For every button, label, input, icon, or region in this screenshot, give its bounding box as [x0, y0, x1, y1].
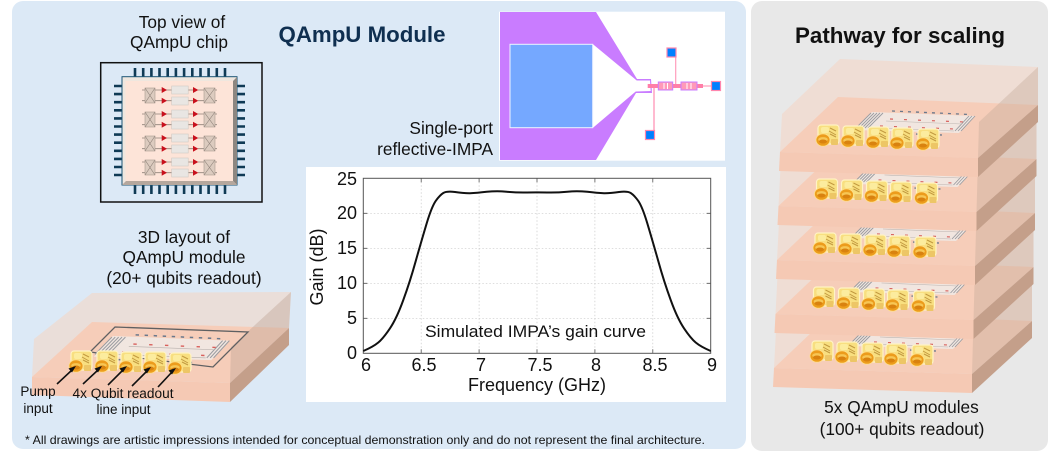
- x axis tick labels: [361, 355, 717, 375]
- label: qubit readout line input: 4x Qubit readout: [72, 386, 174, 401]
- heading: top view of chip: Top view of: [139, 12, 225, 32]
- y axis tick labels: 10: [337, 273, 357, 293]
- x axis tick labels: 7.5: [527, 355, 553, 375]
- heading: pathway for scaling: Pathway for scaling: [795, 23, 1005, 48]
- heading: top view of chip: QAmpU chip: [130, 32, 228, 52]
- y axis tick labels: 25: [337, 169, 357, 189]
- title: QAmpU Module: QAmpU Module: [278, 22, 446, 47]
- chart annotation: Simulated IMPA’s gain curve: [425, 323, 646, 341]
- diagram: stack of five modules: [773, 59, 1038, 393]
- panel: pathway for scaling background: [751, 1, 1048, 451]
- panel: QAmpU module background: [12, 1, 746, 449]
- label: pump input: input: [23, 401, 53, 416]
- label: pump input: Pump: [20, 384, 56, 399]
- x axis tick labels: 7: [476, 355, 486, 375]
- y axis tick labels: 5: [347, 308, 357, 328]
- label: single-port reflective IMPA: Single-port: [409, 118, 493, 138]
- diagram: 3D QAmpU module: [32, 292, 291, 402]
- label: single-port reflective IMPA: reflective-IMPA: [377, 139, 493, 159]
- diagram: reflective IMPA layout: [499, 12, 725, 161]
- heading: 3D layout: 3D layout of: [138, 227, 230, 247]
- y axis tick labels: 15: [337, 238, 357, 258]
- y axis tick labels: 20: [337, 203, 357, 223]
- x axis tick labels: 6.5: [411, 355, 437, 375]
- x axis tick labels: 9: [707, 355, 717, 375]
- footnote: * All drawings are artistic impressions intended for conceptual demonstration only and do not represent the final architecture.: [25, 433, 705, 447]
- x axis title: Frequency (GHz): [468, 375, 606, 395]
- x axis tick labels: 8: [591, 355, 601, 375]
- label: 5x modules: (100+ qubits readout): [820, 419, 984, 439]
- label: 5x modules: 5x QAmpU modules: [824, 397, 979, 417]
- y axis tick labels: [337, 169, 357, 363]
- curve: gain vs frequency: [363, 191, 711, 351]
- arrows: pointing to connectors: [57, 366, 176, 387]
- x axis tick labels: 8.5: [642, 355, 668, 375]
- heading: 3D layout: QAmpU module: [123, 247, 245, 267]
- icon: chip top view: [101, 63, 262, 202]
- y axis title: Gain (dB): [307, 228, 327, 306]
- heading: 3D layout: (20+ qubits readout): [106, 268, 262, 288]
- x axis tick labels: 6: [361, 355, 371, 375]
- y axis tick labels: 0: [347, 343, 357, 363]
- chart: simulated gain curve: [306, 167, 726, 402]
- label: qubit readout line input: line input: [96, 402, 151, 417]
